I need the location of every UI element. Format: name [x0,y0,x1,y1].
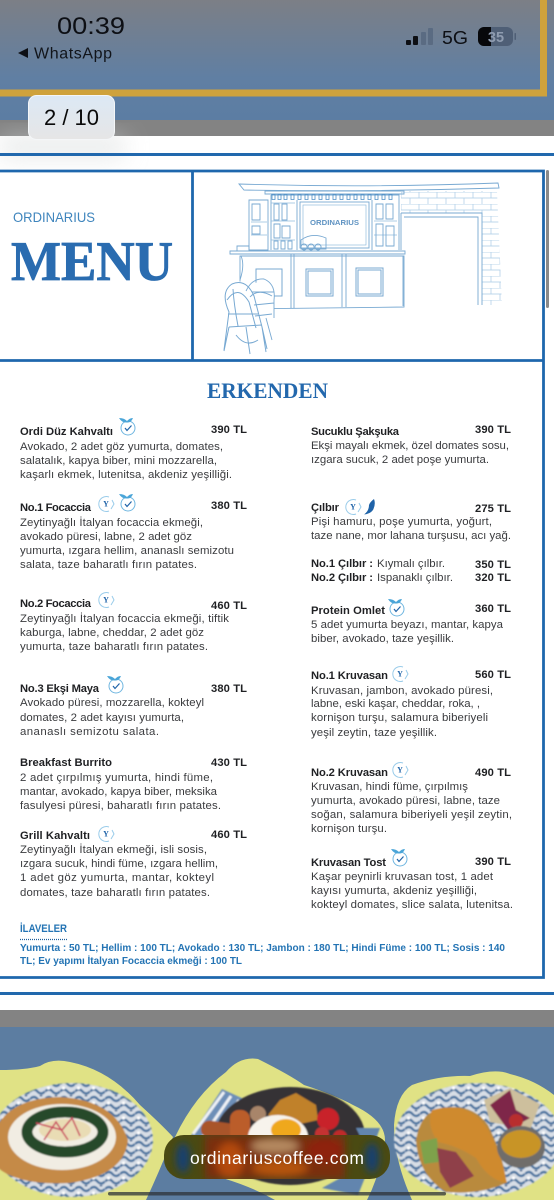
yellow blobs [0,1059,554,1200]
item: No.1 and No.2 Çılbır variants: 350 TL [475,559,511,571]
sign board [300,202,369,248]
item: No.3 Ekşi Maya: No.3 Ekşi Maya [20,683,100,695]
item: No.2 Focaccia [20,592,247,653]
brick wall [401,191,502,305]
icon: chili pepper [364,499,375,514]
gray band above next page [0,1010,554,1028]
icon: Y badge: Y [103,500,109,508]
icon: Y badge [393,666,408,682]
item: No.1 Focaccia: yumurta, ızgara hellim, ananaslı semizotu [20,545,234,557]
icon: Y badge [393,762,408,778]
icon: Y badge: Y [103,830,109,838]
item: No.1 Kruvasan [311,666,511,739]
icon: vegan check [107,676,123,693]
5G label: 5G [442,27,468,48]
item: No.1 Focaccia [20,494,247,571]
item: Çılbır: Pişi hamuru, poşe yumurta, yoğurt, [311,516,492,528]
item: Breakfast Burrito: mantar, avokado, kapya biber, meksika [20,786,218,798]
item: Protein Omlet: 5 adet yumurta beyazı, mantar, kapya [311,619,504,631]
item: Sucuklu Şakşuka: Sucuklu Şakşuka [311,426,400,438]
item: Çılbır: 275 TL [475,503,511,515]
battery: 35 [488,30,504,46]
shelves [249,194,399,250]
item: No.2 Kruvasan: soğan, salamura biberiyeli yeşil zeytin, [311,809,512,821]
gold frame of previous page [0,0,544,93]
item: Grill Kahvaltı: Zeytinyağlı İtalyan ekmeği, isli sosis, [20,843,207,856]
home indicator [108,1192,446,1196]
section heading: ERKENDEN [207,378,328,403]
right menu column [311,424,513,911]
item: No.1 and No.2 Çılbır variants: No.2 Çılbır : [311,572,373,584]
item: No.2 Focaccia: 460 TL [211,600,247,612]
extras heading: İLAVELER [20,922,67,935]
icon: Y badge [346,500,361,514]
pill background with blurred backdrop [164,1135,390,1179]
item: Sucuklu Şakşuka: 390 TL [475,424,511,436]
item: Breakfast Burrito: Breakfast Burrito [20,757,112,769]
gray band under top page [0,120,554,136]
item: Ordi Düz Kahvaltı: kaşarlı ekmek, lutenitsa, akdeniz yeşilliği. [20,469,232,481]
item: No.1 and No.2 Çılbır variants: 320 TL [475,572,511,584]
extras text: Yumurta : 50 TL; Hellim : 100 TL; Avokado : 130 TL; Jambon : 180 TL; Hindi Füme : 100 TL; Sosis : 140 [20,943,505,954]
illustration: cafe counter sketch [222,183,502,354]
item: Grill Kahvaltı [20,826,247,899]
item: Grill Kahvaltı: Grill Kahvaltı [20,830,90,842]
item: Protein Omlet: 360 TL [475,603,511,615]
item: No.2 Kruvasan [311,762,512,835]
icon: Y badge: Y [397,670,403,678]
URL pill: ordinariuscoffee.com [190,1148,364,1168]
item: Sucuklu Şakşuka: Ekşi mayalı ekmek, özel domates sosu, [311,440,509,452]
item: No.3 Ekşi Maya: 380 TL [211,683,247,695]
dotted underline [20,938,68,940]
item: No.1 Focaccia: No.1 Focaccia [20,502,92,514]
background: screenshot of previous page, top [0,0,554,120]
item: No.1 and No.2 Çılbır variants: No.1 Çılbır : [311,558,373,570]
battery [478,27,516,46]
item: Breakfast Burrito [20,757,247,812]
item: Grill Kahvaltı: ızgara sucuk, hindi füme, ızgara hellim, [20,858,218,870]
pill drop shadow [0,136,125,158]
item: No.1 Kruvasan: Kruvasan, jambon, avokado püresi, [311,685,493,697]
roof [239,183,499,194]
status bar [18,13,516,62]
item: Grill Kahvaltı: domates, taze baharatlı fırın patates. [20,887,210,899]
item: No.2 Kruvasan: No.2 Kruvasan [311,767,388,779]
URL pill [164,1135,390,1179]
MENU title: MENU [11,231,173,293]
left menu column [20,418,247,899]
signal bars [406,28,433,45]
item: Breakfast Burrito: 430 TL [211,757,247,769]
item: No.1 Focaccia: salata, taze baharatlı fırın patates. [20,559,197,571]
item: Kruvasan Tost: Kruvasan Tost [311,857,386,869]
brand block [11,209,173,293]
icon: vegan check [388,599,404,616]
item: Protein Omlet: biber, avokado, taze yeşillik. [311,633,454,645]
item: Protein Omlet: Protein Omlet [311,605,385,617]
food photo: spinach pizza plate [0,1083,153,1197]
counter [230,251,405,309]
next page blue background [0,1027,554,1200]
outer top rule [0,153,554,156]
item: No.2 Kruvasan: 490 TL [475,767,511,779]
item: No.2 Focaccia: kaburga, labne, cheddar, 2 adet göz [20,627,204,639]
icon: Y badge [99,592,114,608]
extras block [20,922,505,967]
scrollbar [546,170,549,308]
item: No.1 Kruvasan: 560 TL [475,669,511,681]
item: Çılbır: Çılbır [311,502,340,514]
cafe chairs [222,279,274,354]
pastry display [301,235,326,250]
item: Breakfast Burrito: fasulyesi püresi, baharatlı fırın patates. [20,800,221,812]
item: Sucuklu Şakşuka: ızgara sucuk, 2 adet poşe yumurta. [311,454,489,466]
food photo: croissant plate [394,1083,554,1197]
brand name: ORDINARIUS [13,209,95,225]
item: Ordi Düz Kahvaltı: Avokado, 2 adet göz yumurta, domates, [20,441,223,453]
item: No.3 Ekşi Maya: ananaslı semizotu salata. [20,726,159,738]
item: No.1 Focaccia: 380 TL [211,500,247,512]
item: Ordi Düz Kahvaltı [20,418,247,481]
clock: 00:39 [57,13,125,40]
item: No.1 and No.2 Çılbır variants: Ispanaklı çılbır. [377,572,453,584]
item: No.1 Focaccia: Zeytinyağlı İtalyan focaccia ekmeği, [20,516,203,529]
item: Kruvasan Tost: kayısı yumurta, akdeniz yeşilliği, [311,885,477,897]
item: Kruvasan Tost: 390 TL [475,856,511,868]
icon: vegan check [119,418,135,435]
door frame [401,213,482,305]
item: No.2 Focaccia: No.2 Focaccia [20,598,92,610]
item: No.1 and No.2 Çılbır variants: Kıymalı çılbır. [377,558,445,570]
item: Kruvasan Tost [311,849,513,911]
item: Kruvasan Tost: Kaşar peynirli kruvasan tost, 1 adet [311,871,494,883]
back to WhatsApp: WhatsApp [34,46,112,62]
item: No.1 Kruvasan: No.1 Kruvasan [311,670,388,682]
white menu page [0,136,554,1010]
item: No.2 Kruvasan: Kruvasan, hindi füme, çırpılmış [311,781,468,793]
item: Ordi Düz Kahvaltı: 390 TL [211,424,247,436]
icon: Y badge: Y [350,502,356,512]
item: Ordi Düz Kahvaltı: salatalık, kapya biber, mini mozzarella, [20,455,217,467]
item: No.1 Kruvasan: kornişon turşu, salamura biberiyeli [311,712,488,724]
icon: Y badge: Y [103,596,109,604]
item: No.3 Ekşi Maya [20,676,247,738]
item: No.2 Focaccia: Zeytinyağlı İtalyan focaccia ekmeği, tiftik [20,612,229,625]
item: No.2 Kruvasan: yumurta, avokado püresi, labne, taze [311,795,500,807]
extras block: TL; Ev yapımı İtalyan Focaccia ekmeği : 100 TL [20,954,243,967]
item: No.2 Focaccia: yumurta, taze baharatlı fırın patates. [20,641,208,653]
item: No.1 Kruvasan: labne, eski kaşar, cheddar, roka, , [311,698,480,710]
item: Breakfast Burrito: 2 adet çırpılmış yumurta, hindi füme, [20,772,213,784]
item: No.1 and No.2 Çılbır variants [311,558,511,584]
food photo: skillet breakfast [188,1087,380,1195]
item: Grill Kahvaltı: 1 adet göz yumurta, mantar, kokteyl [20,872,214,884]
icon: vegan check [391,849,407,866]
counter panels [256,268,383,296]
item: Grill Kahvaltı: 460 TL [211,829,247,841]
item: Protein Omlet [311,599,511,645]
item: Sucuklu Şakşuka [311,424,511,466]
icon: Y badge [99,826,114,842]
item: Ordi Düz Kahvaltı: Ordi Düz Kahvaltı [20,426,113,438]
outer bottom rule [0,992,554,995]
item: No.2 Kruvasan: kornişon turşu. [311,823,387,835]
page counter pill [28,96,114,140]
icon: Y badge [99,496,114,512]
item: Kruvasan Tost: kokteyl domates, slice salata, lutenitsa. [311,899,513,911]
sign board: ORDINARIUS [310,220,359,227]
menu frame [0,171,544,978]
page counter pill: 2 / 10 [44,105,99,130]
item: No.3 Ekşi Maya: Avokado püresi, mozzarella, kokteyl [20,697,204,709]
item: Çılbır: taze nane, mor lahana turşusu, acı yağ. [311,530,511,542]
icon: vegan check [119,494,135,511]
item: Çılbır [311,499,511,542]
item: No.1 Kruvasan: yeşil zeytin, taze yeşillik. [311,727,437,739]
item: No.3 Ekşi Maya: domates, 2 adet kayısı yumurta, [20,712,184,724]
icon: Y badge: Y [397,766,403,774]
item: No.1 Focaccia: avokado püresi, labne, 2 adet göz [20,531,192,543]
